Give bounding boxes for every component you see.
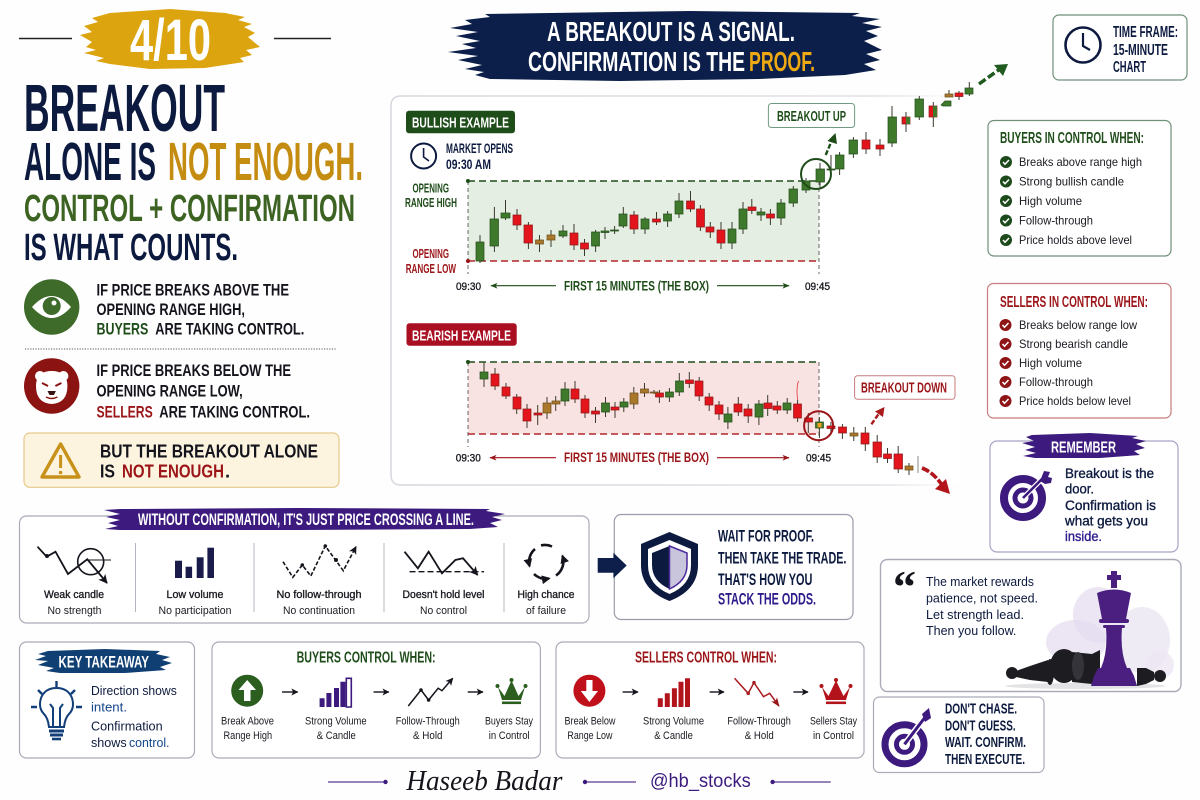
item: weak candle <box>38 547 111 617</box>
breakdown circle <box>804 411 833 440</box>
title: NOT ENOUGH. <box>168 132 363 192</box>
warning callout: BUT THE BREAKOUT ALONE <box>100 440 318 461</box>
checklist: High volume <box>1019 356 1082 370</box>
step: break above: Range High <box>224 730 272 742</box>
callout: sellers rule <box>24 358 310 422</box>
arrow: breakout down short <box>871 407 884 424</box>
header banner: A BREAKOUT IS A SIGNAL. <box>547 16 795 47</box>
panel: wait for proof: THAT'S HOW YOU <box>718 571 812 589</box>
header banner: PROOF. <box>749 46 815 77</box>
title: BREAKOUT <box>24 71 225 146</box>
checklist <box>1000 155 1142 247</box>
item: high chance of failure: of failure <box>526 605 566 617</box>
panel: remember: what gets you <box>1064 514 1148 528</box>
panel: do not chase: THEN EXECUTE. <box>945 751 1025 768</box>
callout: buyers rule <box>24 279 304 339</box>
item: does not hold level: Doesn't hold level <box>402 589 484 601</box>
time axis <box>456 278 830 294</box>
footer: author credit: @hb_stocks <box>650 771 751 792</box>
quote text <box>926 574 1038 638</box>
step: strong volume <box>643 678 704 742</box>
panel: remember: REMEMBER <box>1051 440 1116 456</box>
panel: sellers control flow: SELLERS CONTROL WHEN: <box>635 650 777 667</box>
step: strong volume: & Candle <box>654 730 693 742</box>
callout: buyers rule: IF PRICE BREAKS ABOVE THE <box>96 280 289 299</box>
time axis: 09:45 <box>806 453 831 465</box>
item: does not hold level: No control <box>420 605 467 617</box>
warning callout: IS <box>100 460 115 481</box>
item: no follow-through: No follow-through <box>276 589 362 601</box>
panel: quote <box>880 560 1181 692</box>
arrow: bearish trend <box>922 468 950 494</box>
opening range labels: OPENING <box>412 246 449 261</box>
quote text: Then you follow. <box>926 623 1016 638</box>
item: low volume <box>158 548 232 617</box>
time axis: 09:30 <box>456 281 481 293</box>
step: follow-through: & Hold <box>745 730 774 742</box>
step: strong volume: & Candle <box>317 730 356 742</box>
label: bearish example <box>406 323 517 346</box>
panel: time frame <box>1053 15 1187 80</box>
panel: key takeaway: Confirmation <box>91 719 163 734</box>
panel: time frame: 15-MINUTE <box>1113 42 1168 59</box>
checklist: Breaks below range low <box>1019 318 1137 332</box>
step: strong volume <box>305 678 367 742</box>
step: buyers crown: in Control <box>489 730 530 742</box>
item: low volume: Low volume <box>166 589 224 601</box>
warning callout <box>24 433 339 487</box>
step: follow-through: Follow-Through <box>727 716 791 728</box>
panel: key takeaway: Direction shows <box>91 683 177 698</box>
panel: wait for proof: WAIT FOR PROOF. <box>718 528 814 546</box>
label: bullish example: BULLISH EXAMPLE <box>412 114 509 131</box>
candlesticks <box>476 82 973 263</box>
banner <box>35 649 172 673</box>
checklist: Price holds above level <box>1019 233 1132 247</box>
callout: sellers rule: OPENING RANGE LOW, <box>96 382 243 401</box>
checklist: High volume <box>1019 194 1082 208</box>
title: IS WHAT COUNTS. <box>24 227 238 269</box>
icon: eye <box>24 279 79 335</box>
icon: shield <box>641 532 698 601</box>
panel: remember <box>990 433 1178 552</box>
opening range box <box>466 179 819 274</box>
item: weak candle: No strength <box>48 605 102 617</box>
panel: examples <box>391 96 960 485</box>
step: break above: Break Above <box>221 716 274 728</box>
panel: wait for proof: STACK THE ODDS. <box>718 590 816 608</box>
icon: light bulb <box>31 681 82 739</box>
item: high chance of failure: High chance <box>518 589 574 601</box>
item: does not hold level <box>402 552 484 617</box>
panel: key takeaway: control. <box>129 735 170 750</box>
checklist: Strong bearish candle <box>1019 337 1128 351</box>
title banner: WITHOUT CONFIRMATION, IT'S JUST PRICE CROSSING A LINE. <box>138 511 474 529</box>
bullish chart <box>405 64 1008 294</box>
panel: sellers in control <box>988 284 1171 418</box>
panel: sellers control flow <box>556 642 864 758</box>
arrow: bullish trend <box>979 64 1008 84</box>
opening range labels: OPENING <box>412 180 449 196</box>
label: breakout down <box>855 376 955 399</box>
step: strong volume: Strong Volume <box>643 716 704 728</box>
label: breakout up: BREAKOUT UP <box>777 109 846 125</box>
arrow: breakout up short <box>826 133 837 155</box>
footer: author credit: Haseeb Badar <box>405 766 562 797</box>
panel: remember: Confirmation is <box>1065 498 1156 513</box>
step: follow-through: & Hold <box>413 730 442 742</box>
label: bearish example: BEARISH EXAMPLE <box>412 328 511 345</box>
step: buyers crown: Buyers Stay <box>485 716 533 728</box>
item: high chance of failure <box>518 545 574 617</box>
panel: key takeaway <box>20 642 194 758</box>
candlesticks <box>480 362 918 475</box>
checklist: Follow-through <box>1019 214 1093 228</box>
banner: KEY TAKEAWAY <box>58 652 149 671</box>
checklist <box>1000 318 1137 408</box>
icon: target <box>1004 471 1052 517</box>
header banner <box>448 11 882 81</box>
title <box>24 71 363 269</box>
step: sellers crown: Sellers Stay <box>810 716 857 728</box>
panel: wait for proof: THEN TAKE THE TRADE. <box>718 549 846 567</box>
purple king <box>1091 571 1137 686</box>
step: follow-through: Follow-Through <box>396 716 460 728</box>
quote text: Let strength lead. <box>926 607 1024 622</box>
series number badge: 4/10 <box>130 8 211 73</box>
step: sellers crown <box>810 678 857 742</box>
step: follow-through <box>727 678 791 742</box>
panel: key takeaway: intent. <box>91 700 127 715</box>
time axis <box>456 449 831 465</box>
step: follow-through <box>396 678 460 742</box>
market opens note: 09:30 AM <box>446 156 491 172</box>
quote mark: “ <box>893 561 916 612</box>
panel: do not chase: DON'T GUESS. <box>945 717 1016 734</box>
opening range labels: RANGE HIGH <box>405 195 457 210</box>
panel: remember: inside. <box>1065 529 1102 544</box>
series number badge <box>19 8 331 73</box>
market opens note: MARKET OPENS <box>446 140 513 156</box>
panel: key takeaway: shows <box>91 735 127 750</box>
footer: author credit <box>328 766 831 797</box>
illustration: chess pieces <box>1005 571 1174 689</box>
checklist: Breaks above range high <box>1019 155 1142 169</box>
panel: wait for proof <box>614 514 853 620</box>
callout: sellers rule: IF PRICE BREAKS BELOW THE <box>96 361 291 380</box>
icon: clock <box>1066 28 1100 62</box>
item: no follow-through: No continuation <box>283 605 355 617</box>
step: break below <box>564 675 616 742</box>
arrow: to proof panel <box>598 553 627 578</box>
opening range box <box>466 360 819 447</box>
step: sellers crown: in Control <box>813 730 854 742</box>
header banner: CONFIRMATION IS THE <box>528 46 745 77</box>
panel: do not chase: WAIT. CONFIRM. <box>945 734 1026 751</box>
checklist: Follow-through <box>1019 375 1093 389</box>
panel: remember: Breakout is the <box>1065 466 1154 481</box>
warning callout: NOT ENOUGH <box>122 460 224 481</box>
panel: remember: door. <box>1065 482 1094 496</box>
label: breakout up <box>768 104 855 128</box>
title banner <box>104 508 505 530</box>
step: strong volume: Strong Volume <box>305 716 367 728</box>
callout: sellers rule: ARE TAKING CONTROL. <box>159 403 310 422</box>
time axis: 09:30 <box>456 453 481 465</box>
item: low volume: No participation <box>158 605 232 617</box>
fallen black pieces <box>1006 649 1166 686</box>
quote text: The market rewards <box>926 574 1034 589</box>
title: CONTROL + CONFIRMATION <box>24 188 355 230</box>
step: break below: Range Low <box>567 730 613 742</box>
item: no follow-through <box>276 544 362 617</box>
time axis: FIRST 15 MINUTES (THE BOX) <box>564 278 709 294</box>
panel: buyers control flow: BUYERS CONTROL WHEN: <box>297 650 436 667</box>
panel: time frame: CHART <box>1113 59 1146 76</box>
market opens note <box>411 140 513 172</box>
breakout circle <box>801 159 831 189</box>
panel: do not chase: DON'T CHASE. <box>945 700 1017 717</box>
checklist: Strong bullish candle <box>1019 174 1124 188</box>
panel: buyers in control <box>988 120 1171 256</box>
opening range labels <box>405 180 457 276</box>
panel: buyers control flow <box>212 642 540 758</box>
step: buyers crown <box>485 678 533 742</box>
callout: sellers rule: SELLERS <box>96 403 153 422</box>
step: break above <box>221 675 274 742</box>
bearish chart <box>456 360 955 494</box>
icon: warning triangle <box>42 444 79 477</box>
time axis: FIRST 15 MINUTES (THE BOX) <box>564 449 709 465</box>
step: break below: Break Below <box>564 716 616 728</box>
label: breakout down: BREAKOUT DOWN <box>861 381 947 397</box>
panel: without confirmation <box>20 508 589 623</box>
panel: do not chase <box>874 697 1044 772</box>
warning callout: . <box>225 460 230 481</box>
opening range labels: RANGE LOW <box>406 261 456 276</box>
quote text: patience, not speed. <box>926 590 1038 606</box>
label: bullish example <box>406 111 515 133</box>
icon: clock <box>411 144 436 168</box>
callout: buyers rule: ARE TAKING CONTROL. <box>155 320 304 339</box>
callout: buyers rule: OPENING RANGE HIGH, <box>96 300 245 319</box>
icon: target <box>885 708 931 764</box>
time axis: 09:45 <box>805 281 830 293</box>
item: weak candle: Weak candle <box>44 589 104 601</box>
callout: buyers rule: BUYERS <box>96 320 148 339</box>
icon: bear <box>24 358 79 414</box>
title: ALONE IS <box>24 132 156 192</box>
checklist: Price holds below level <box>1019 394 1131 408</box>
